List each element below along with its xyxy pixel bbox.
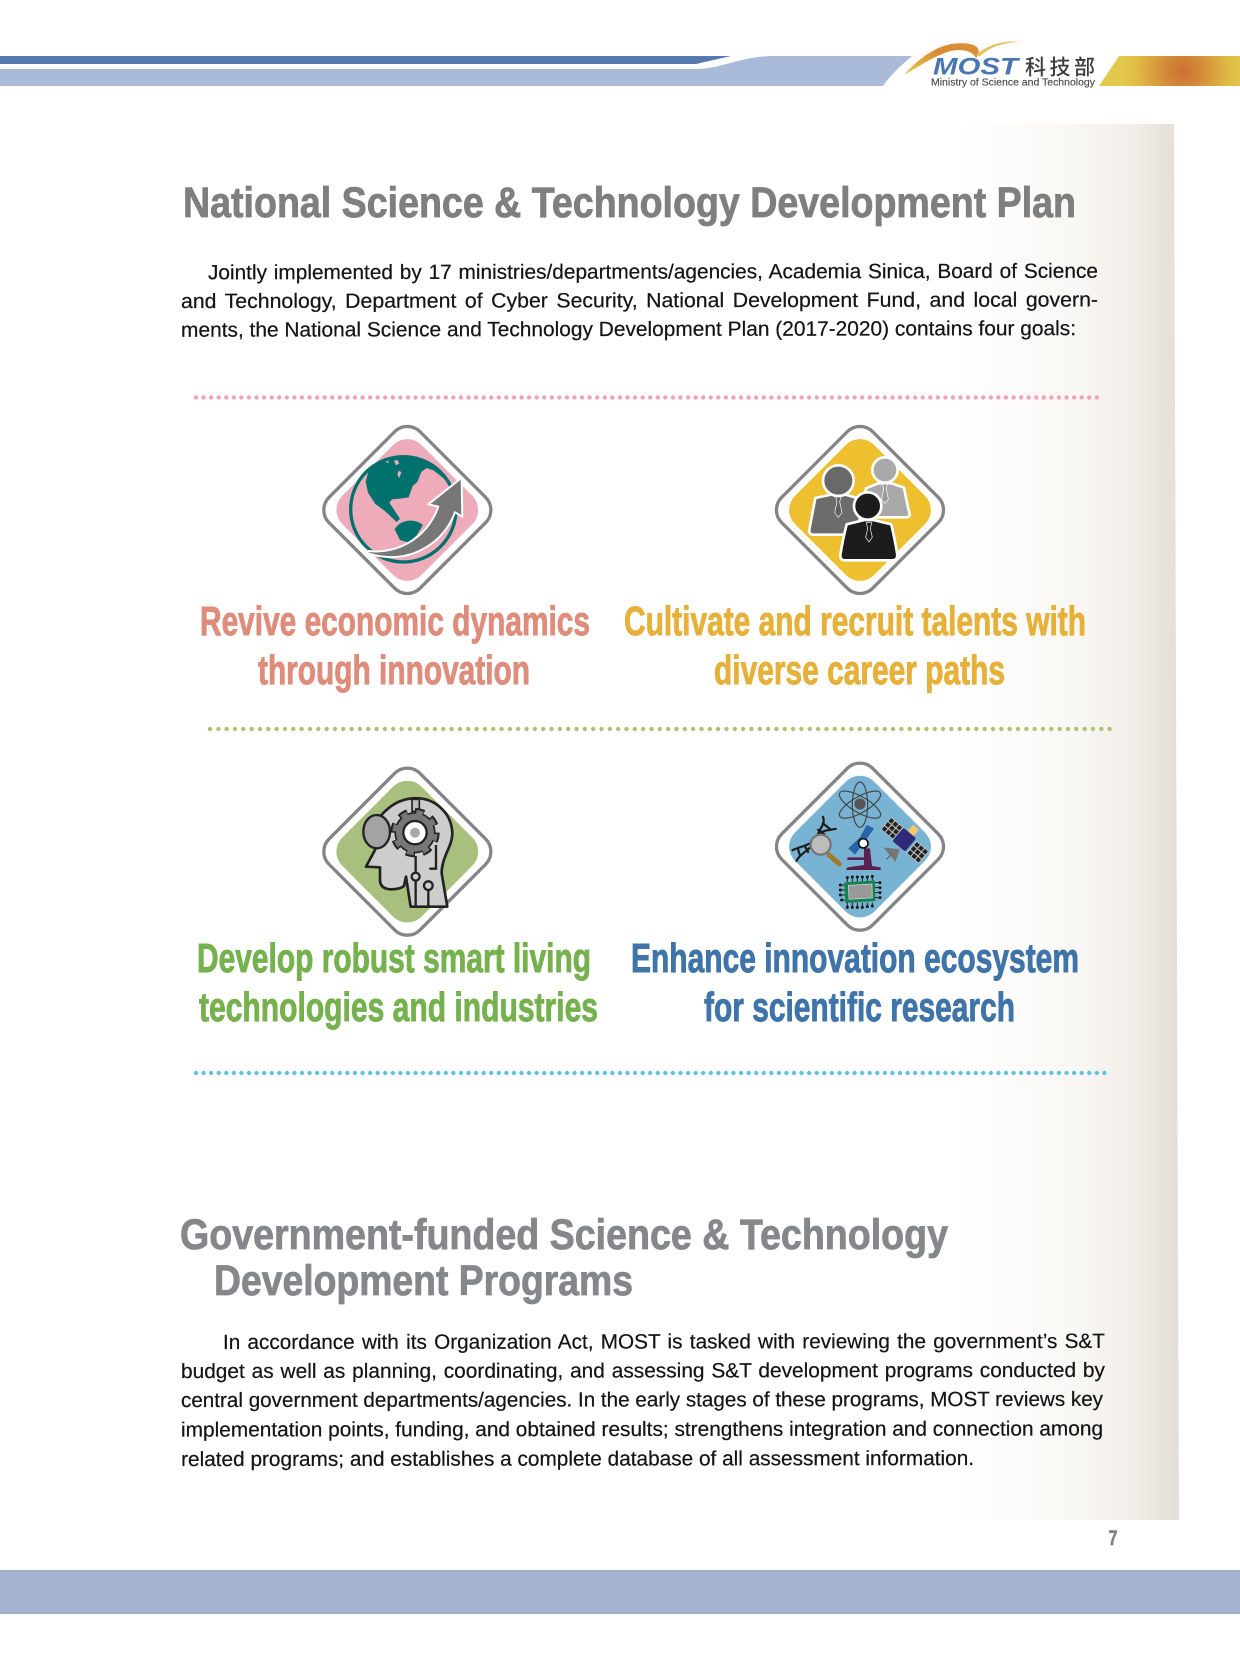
icon: three business people xyxy=(769,419,951,601)
logo wordmark: MOST xyxy=(933,54,1021,80)
goal 1 label: through innovation xyxy=(258,647,530,693)
header light blue band xyxy=(0,56,912,86)
header gold block xyxy=(1099,56,1240,86)
goal 2 label: Cultivate and recruit talents with xyxy=(624,598,1086,644)
goal 4 label xyxy=(631,935,1079,1030)
header band xyxy=(0,56,1240,86)
dna and magnifier xyxy=(792,816,837,862)
goal 2 label: diverse career paths xyxy=(714,647,1005,693)
goal 3 label: technologies and industries xyxy=(199,984,598,1030)
goal 4 label: for scientific research xyxy=(704,984,1015,1030)
goal 4 label: Enhance innovation ecosystem xyxy=(631,935,1079,981)
satellite xyxy=(881,818,903,839)
logo subtitle: Ministry of Science and Technology xyxy=(931,76,1096,88)
section heading: Development Programs xyxy=(214,1258,633,1305)
icon: globe with rising arrow xyxy=(316,419,498,601)
intro paragraph: and Technology, Department of Cyber Security, National Development Fund, and local govern- xyxy=(181,288,1098,313)
page number: 7 xyxy=(1108,1527,1118,1550)
footer band xyxy=(0,1570,1240,1614)
icon: science and research tools xyxy=(769,756,951,938)
programs paragraph: budget as well as planning, coordinating, and assessing S&T development programs conducted by xyxy=(181,1359,1106,1383)
icon: head with gear and circuits xyxy=(316,761,498,943)
dotted divider green xyxy=(210,727,1114,731)
header dark blue stripe xyxy=(0,56,731,64)
programs paragraph: In accordance with its Organization Act, MOST is tasked with reviewing the government’s S&T xyxy=(223,1330,1105,1354)
dotted divider pink xyxy=(196,395,1099,400)
atom xyxy=(836,782,884,827)
programs paragraph: related programs; and establishes a complete database of all assessment information. xyxy=(181,1447,974,1471)
dotted divider blue xyxy=(196,1071,1108,1075)
programs paragraph: central government departments/agencies. In the early stages of these programs, MOST reviews key xyxy=(181,1388,1104,1412)
background panel: beige gradient xyxy=(950,124,1179,1520)
intro paragraph: ments, the National Science and Technology Development Plan (2017-2020) contains four goals: xyxy=(181,317,1076,342)
goal 3 label: Develop robust smart living xyxy=(197,935,591,981)
logo chinese name: 科技部 xyxy=(1025,52,1095,82)
section heading: Government-funded Science & Technology xyxy=(180,1212,948,1259)
goal 3 label xyxy=(197,935,598,1030)
title: National Science & Technology Development Plan xyxy=(183,180,1076,227)
goal 1 label: Revive economic dynamics xyxy=(200,598,590,644)
section heading xyxy=(180,1212,948,1305)
logo: MOST Ministry of Science and Technology xyxy=(904,42,1096,88)
microscope xyxy=(848,825,874,855)
goal 2 label xyxy=(624,598,1086,693)
microchip xyxy=(840,876,880,907)
intro paragraph xyxy=(181,260,1098,342)
programs paragraph: implementation points, funding, and obtained results; strengthens integration and connection among xyxy=(181,1417,1103,1441)
goal 1 label xyxy=(200,598,590,693)
logo arcs xyxy=(904,42,1019,75)
programs paragraph xyxy=(181,1330,1106,1471)
intro paragraph: Jointly implemented by 17 ministries/departments/agencies, Academia Sinica, Board of Science xyxy=(208,260,1098,284)
